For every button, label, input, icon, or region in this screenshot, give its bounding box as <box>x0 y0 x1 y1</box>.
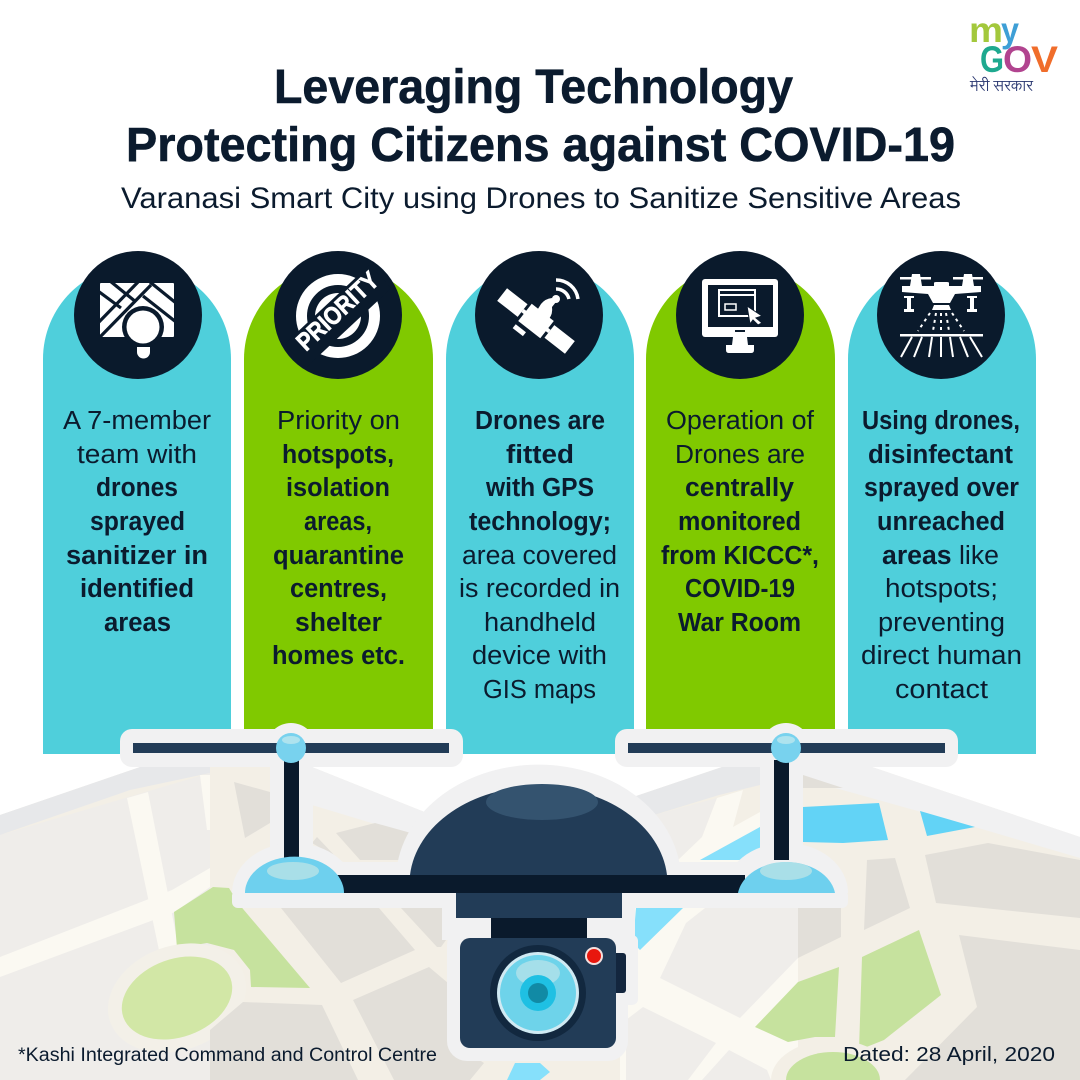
text: priority areas: isolation <box>286 474 390 502</box>
text: team with drones: identified <box>80 575 194 603</box>
date: Dated: 28 April, 2020 <box>843 1044 1055 1066</box>
text: team with drones: sanitizer in <box>66 542 208 570</box>
text: central monitoring: COVID-19 <box>685 575 795 603</box>
text: disinfectant spraying: hotspots; <box>885 575 998 603</box>
text: GPS technology: Drones are <box>475 407 605 435</box>
logo: MyGov: y <box>1001 11 1019 50</box>
text: central monitoring: Drones are <box>675 441 805 469</box>
title <box>126 61 955 172</box>
text: priority areas: centres, <box>290 575 387 603</box>
right foot <box>738 862 835 893</box>
icon: GPS satellite <box>475 251 603 379</box>
text: GPS technology: technology; <box>469 508 611 536</box>
map background <box>0 767 1080 1080</box>
text: team with drones: sprayed <box>90 508 185 536</box>
subtitle: Varanasi Smart City using Drones to Sanitize Sensitive Areas <box>121 182 961 215</box>
text: priority areas: quarantine <box>273 542 404 570</box>
panel: team with drones <box>43 265 231 754</box>
drone dome <box>410 787 667 875</box>
text: disinfectant spraying <box>861 407 1022 704</box>
left rotor hub <box>276 733 306 763</box>
drone outline halo <box>120 723 958 1061</box>
right rotor hub <box>771 733 801 763</box>
text: priority areas: shelter <box>295 609 382 637</box>
dome highlight <box>486 784 598 820</box>
text: central monitoring: from KICCC*, <box>661 542 819 570</box>
right arm <box>774 760 789 860</box>
text: disinfectant spraying: preventing <box>878 609 1005 637</box>
text: disinfectant spraying: disinfectant <box>868 441 1014 469</box>
panel: GPS technology <box>446 265 634 754</box>
text: disinfectant spraying: areas like <box>882 542 999 570</box>
icon: monitor with browser window <box>676 251 804 379</box>
text: team with drones: drones <box>96 474 178 502</box>
text: central monitoring <box>661 407 819 637</box>
text: GPS technology: area covered <box>462 542 617 570</box>
logo: MyGov <box>969 11 1058 95</box>
panel: disinfectant spraying <box>848 265 1036 754</box>
drone <box>120 723 958 1061</box>
footnote: *Kashi Integrated Command and Control Centre <box>18 1045 437 1066</box>
text: priority areas <box>272 407 405 670</box>
text: GPS technology: device with <box>472 642 607 670</box>
right rotor <box>628 743 945 753</box>
title: Leveraging Technology <box>274 61 793 114</box>
logo: MyGov: V <box>1031 39 1058 80</box>
logo: MyGov: G <box>980 39 1004 80</box>
text: central monitoring: monitored <box>678 508 801 536</box>
text: priority areas: homes etc. <box>272 642 405 670</box>
icon: map with location pin <box>74 251 202 379</box>
text: priority areas: areas, <box>304 508 372 536</box>
text: GPS technology: with GPS <box>485 474 594 502</box>
title: Protecting Citizens against COVID-19 <box>126 119 955 172</box>
icon: spraying drone <box>877 251 1005 379</box>
panel: central monitoring <box>646 265 835 754</box>
left foot <box>245 857 344 893</box>
text: disinfectant spraying: Using drones, <box>862 407 1020 435</box>
text: GPS technology: is recorded in <box>459 575 620 603</box>
left rotor <box>133 743 449 753</box>
text: GPS technology <box>459 407 620 704</box>
text: central monitoring: Operation of <box>666 407 815 435</box>
text: central monitoring: War Room <box>678 609 801 637</box>
text: GPS technology: GIS maps <box>483 676 596 704</box>
text: disinfectant spraying: direct human <box>861 642 1022 670</box>
text: team with drones <box>63 407 212 637</box>
panel: priority areas <box>244 265 433 754</box>
text: disinfectant spraying: unreached <box>877 508 1005 536</box>
logo: MyGov: m <box>969 11 1003 50</box>
gimbal mount <box>456 893 622 938</box>
horizontal frame <box>330 875 745 893</box>
text: GPS technology: fitted <box>506 441 574 469</box>
text: team with drones: areas <box>104 609 171 637</box>
logo: MyGov: मेरी सरकार <box>969 75 1034 95</box>
text: disinfectant spraying: contact <box>895 676 988 704</box>
left arm <box>284 760 299 860</box>
text: priority areas: Priority on <box>277 407 400 435</box>
text: priority areas: hotspots, <box>282 441 394 469</box>
text: disinfectant spraying: sprayed over <box>864 474 1019 502</box>
text: team with drones: A 7-member <box>63 407 212 435</box>
text: team with drones: team with <box>77 441 197 469</box>
icon: priority stamp <box>274 251 402 379</box>
icon: priority stamp: PRIORITY <box>291 266 385 356</box>
text: central monitoring: centrally <box>685 474 795 502</box>
text: GPS technology: handheld <box>484 609 596 637</box>
logo: MyGov: O <box>1003 39 1032 80</box>
camera <box>460 938 626 1048</box>
